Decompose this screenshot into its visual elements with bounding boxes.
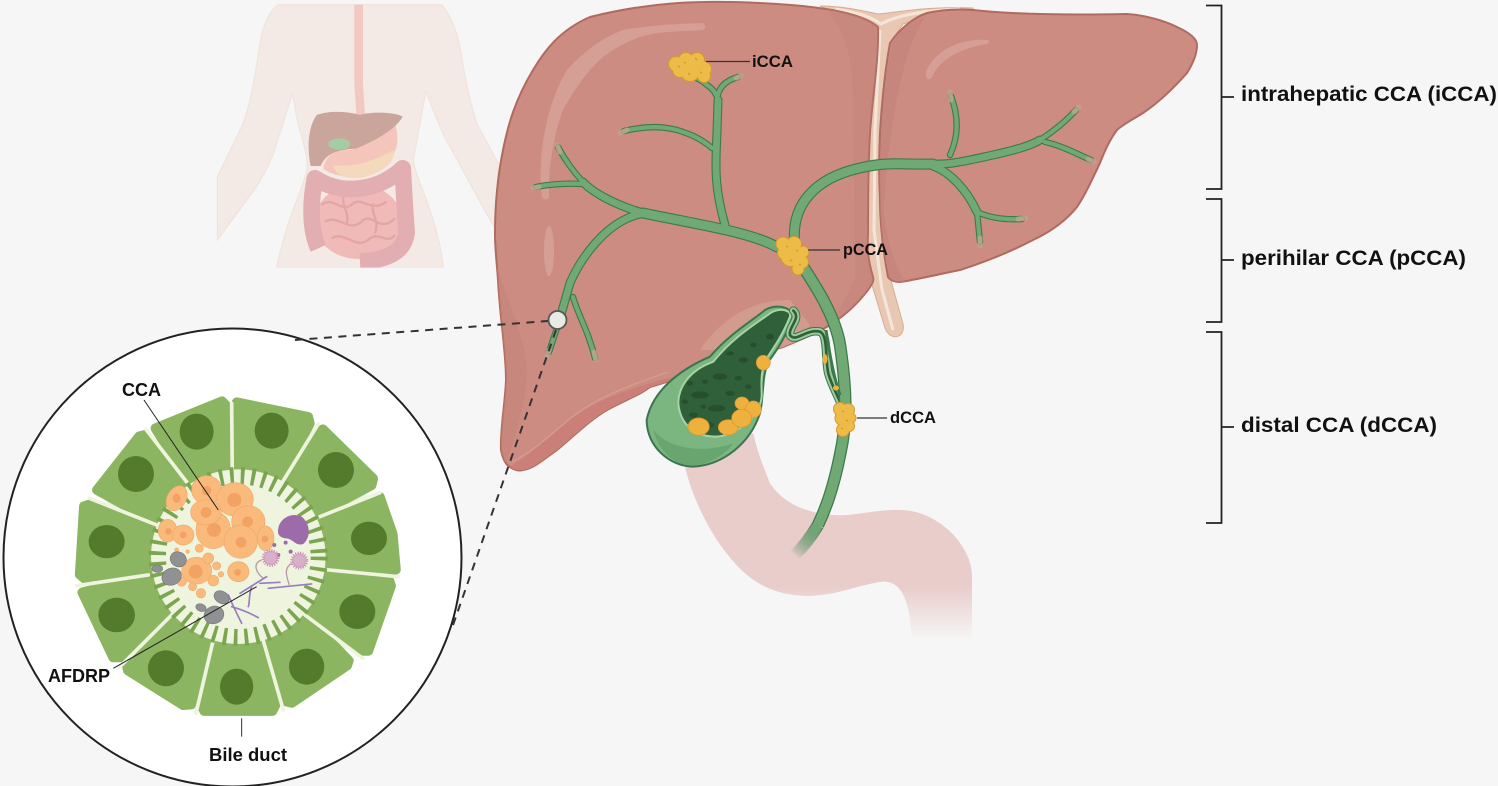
- purple immune cell: [272, 515, 309, 557]
- bracket: perihilar: [1206, 199, 1234, 322]
- body silhouette with digestive organs: [217, 5, 498, 268]
- pale band around gallbladder: [700, 300, 810, 350]
- gallbladder wall: [647, 307, 793, 467]
- label: dCCA: [857, 408, 936, 427]
- lens circle: [4, 328, 462, 786]
- label: pCCA: pCCA: [843, 240, 888, 259]
- highlight arc: [540, 23, 705, 200]
- leader line: bile duct: [240, 718, 243, 737]
- nuclei: [89, 413, 387, 705]
- lumen: [151, 469, 326, 644]
- small stones in cystic duct: [822, 354, 839, 390]
- pale base between cells: [97, 415, 380, 698]
- gallbladder wall shadow: [653, 430, 733, 466]
- common bile duct: [795, 262, 845, 555]
- mottled bile: [682, 334, 774, 428]
- label: pCCA: [808, 240, 888, 259]
- tumour cell nuclei: [165, 486, 268, 579]
- shaded right edge: [826, 10, 878, 318]
- heading: intrahepatic CCA: intrahepatic CCA (iCCA): [1241, 83, 1497, 106]
- falciform ligament: [820, 6, 973, 337]
- label: iCCA: [706, 52, 793, 71]
- tumour: dCCA: [834, 403, 856, 436]
- bracket: distal: [1206, 332, 1234, 523]
- gallbladder cavity: [678, 310, 790, 437]
- epithelial cells: [80, 401, 396, 711]
- zoom origin marker: [548, 311, 566, 329]
- leader line: AFDRP: [113, 587, 257, 668]
- label: iCCA: iCCA: [752, 52, 793, 71]
- CCA tumour cells: [158, 476, 274, 598]
- duct outlines: [536, 77, 1091, 358]
- gallbladder and cystic duct: [647, 307, 841, 467]
- shaded left edge: [497, 267, 507, 462]
- bile duct tree: [533, 76, 1094, 360]
- duct interiors: [536, 77, 1091, 358]
- label: Bile duct: Bile duct: [209, 745, 287, 765]
- shaded lower rim: [510, 376, 674, 470]
- faded duct tips: [533, 76, 1094, 360]
- liver right lobe: [490, 2, 885, 471]
- heading: distal CCA: distal CCA (dCCA): [1241, 414, 1437, 437]
- highlight: [926, 40, 989, 79]
- fibroblasts and fibres: [228, 551, 312, 623]
- grey AFDRP particles: [152, 549, 232, 627]
- miniature liver: [309, 112, 403, 166]
- gaps between cells: [77, 403, 398, 713]
- bracket: intrahepatic: [1206, 6, 1234, 189]
- tumour: iCCA: [669, 53, 711, 82]
- gallstones: [688, 355, 770, 435]
- colon: [312, 168, 407, 262]
- microvilli: [157, 476, 319, 638]
- label: CCA: CCA: [122, 380, 161, 400]
- liver left lobe: [879, 9, 1197, 282]
- small intestine: [320, 191, 398, 259]
- magnified bile duct cross-section: [4, 328, 462, 786]
- torso and arms: [217, 5, 498, 268]
- stomach: [323, 126, 398, 176]
- highlight streak: [544, 226, 554, 276]
- heading: perihilar CCA: perihilar CCA (pCCA): [1241, 247, 1466, 270]
- leader line: CCA: [144, 400, 218, 510]
- esophagus: [359, 5, 361, 115]
- label: dCCA: dCCA: [890, 408, 936, 427]
- cystic duct: [790, 311, 841, 403]
- miniature gallbladder: [328, 138, 350, 150]
- label: AFDRP: AFDRP: [48, 666, 110, 686]
- pancreas: [333, 150, 394, 178]
- tumour: pCCA: [776, 237, 808, 274]
- duodenum: [685, 433, 972, 640]
- zoom connector dashed lines: [295, 321, 556, 628]
- shaded inner edge: [880, 17, 925, 282]
